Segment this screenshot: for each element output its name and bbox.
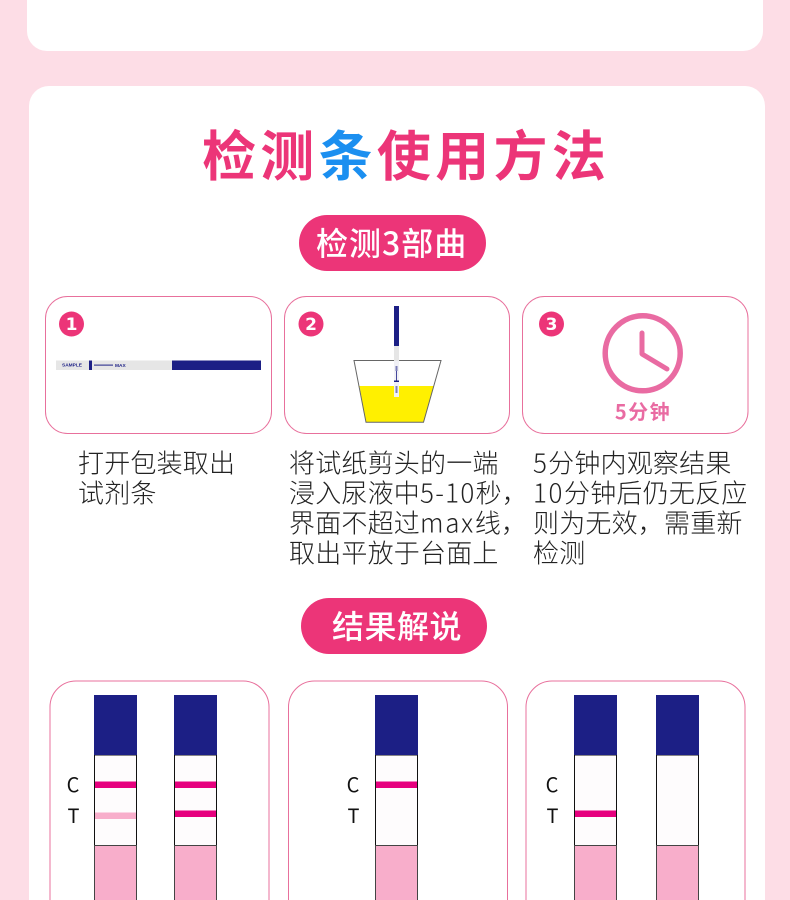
icon: strip dipped in urine cup	[354, 306, 441, 422]
icon: test strip horizontal: SAMPLE	[62, 362, 83, 368]
heading pill: three steps: 检测3部曲	[316, 219, 467, 265]
icon: number 1	[59, 312, 84, 336]
icon: test strip horizontal	[56, 360, 261, 370]
panel: result 3 invalid	[526, 681, 745, 900]
strip: strong T line	[174, 695, 217, 900]
text: step 3 description: 检测	[533, 534, 585, 570]
icon: clock	[605, 316, 680, 391]
label: T: T	[348, 800, 360, 829]
panel: step 2	[284, 296, 510, 434]
title: 检测条使用方法	[202, 112, 610, 192]
label: T: T	[68, 800, 80, 829]
strip: faint T line	[94, 695, 137, 900]
icon: number 1: 1	[66, 315, 77, 335]
text: step 2 description: 界面不超过max线，	[289, 504, 527, 540]
label: T: T	[547, 800, 559, 829]
panel: previous card bottom	[27, 0, 763, 51]
text: step 2 description: 将试纸剪头的一端	[289, 444, 499, 480]
text: step 1 description	[78, 444, 235, 510]
text: step 3 description: 10分钟后仍无反应	[533, 474, 747, 510]
icon: number 2: 2	[305, 315, 317, 335]
label: C: C	[347, 769, 360, 798]
text: step 1 description: 打开包装取出	[78, 444, 235, 480]
label: C: C	[546, 769, 559, 798]
heading pill: result interpretation	[301, 598, 487, 654]
panel: step 1	[46, 296, 272, 434]
label: C: C	[67, 769, 80, 798]
text: step 2 description: 浸入尿液中5-10秒，	[289, 474, 528, 510]
text: step 3 description: 则为无效，需重新	[533, 504, 743, 540]
heading pill: three steps	[299, 215, 486, 271]
text: step 3 description	[533, 444, 747, 570]
panel: step 3	[522, 296, 748, 434]
strip: T line only	[574, 695, 617, 900]
icon: number 3: 3	[546, 315, 557, 335]
text: step 1 description: 试剂条	[78, 474, 157, 510]
icon: number 2	[298, 312, 324, 336]
label: 5 minutes: 5分钟	[615, 396, 671, 425]
icon: number 3	[539, 312, 564, 336]
panel: result 1 positive	[50, 681, 269, 900]
text: step 2 description	[289, 444, 528, 570]
panel: result 2 negative	[288, 681, 508, 900]
icon: test strip horizontal: MAX	[115, 363, 126, 369]
strip: C line only	[375, 695, 418, 900]
heading pill: result interpretation: 结果解说	[332, 602, 462, 648]
strip: no lines	[656, 695, 699, 900]
text: step 2 description: 取出平放于台面上	[289, 534, 499, 570]
text: step 3 description: 5分钟内观察结果	[533, 444, 732, 480]
